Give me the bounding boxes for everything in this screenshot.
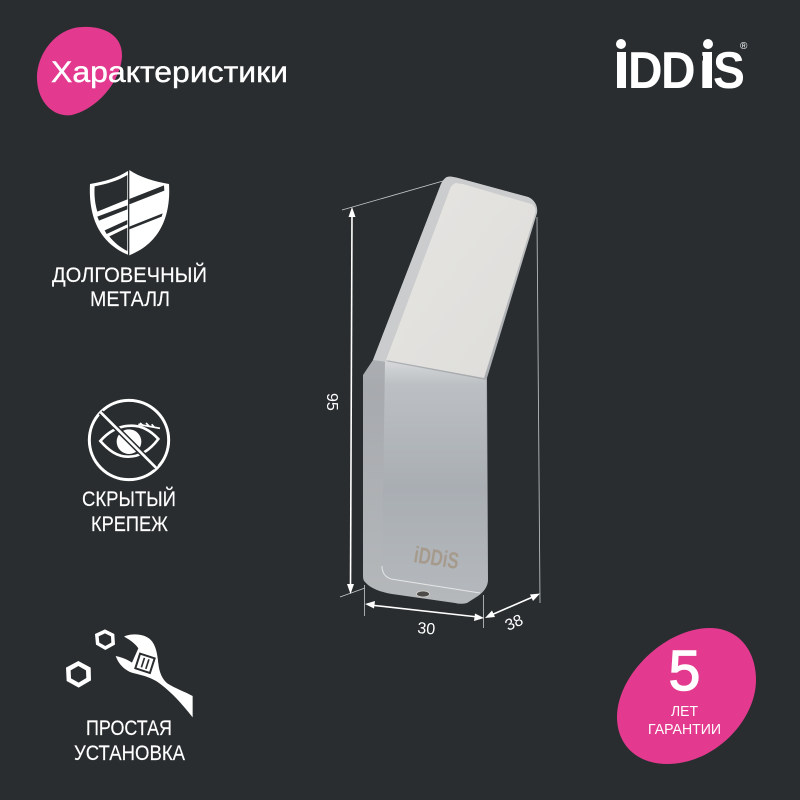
upper slanted edge <box>373 177 535 362</box>
years label: ЛЕТ <box>671 703 698 720</box>
screw hole <box>416 591 430 597</box>
feature: hidden fastening <box>82 400 176 536</box>
feature: durable metal <box>52 170 207 311</box>
product: towel hook <box>363 177 537 604</box>
registered mark: ® <box>740 41 748 52</box>
icon: shield <box>90 170 169 255</box>
label: СКРЫТЫЙ <box>82 487 176 511</box>
badge blob <box>617 628 756 764</box>
feature: easy installation <box>66 629 193 765</box>
extension line <box>537 217 540 603</box>
warranty label: ГАРАНТИИ <box>648 721 721 738</box>
warranty badge <box>617 628 756 764</box>
label: ПРОСТАЯ <box>86 717 172 740</box>
logo i stems and dots <box>617 52 712 88</box>
arrow line <box>489 596 535 616</box>
value: 30 <box>417 620 436 639</box>
feature: durable metal: МЕТАЛЛ <box>90 288 170 311</box>
arrow line <box>370 605 478 617</box>
value: 38 <box>503 612 526 635</box>
hook body silhouette <box>363 177 537 604</box>
heading text: Характеристики <box>51 56 288 89</box>
arrow line <box>350 212 352 588</box>
extension lines <box>340 181 443 597</box>
logo wordmark: iDDiS <box>615 41 745 99</box>
feature: hidden fastening: КРЕПЕЖ <box>91 513 169 536</box>
value: 95 <box>323 393 340 411</box>
dimension: height 95 <box>323 181 443 597</box>
heading: Характеристики <box>37 27 288 115</box>
lower front panel <box>382 361 487 592</box>
label: ДОЛГОВЕЧНЫЙ <box>52 263 207 287</box>
logo: IDDIS <box>614 39 748 99</box>
dimension: depth 38 <box>485 217 540 635</box>
panel highlight <box>382 566 480 593</box>
dimension: width 30 <box>364 585 484 639</box>
product logo: iDDiS <box>412 541 461 574</box>
heading blob <box>37 27 122 115</box>
icon: crossed-out eye <box>89 400 169 480</box>
extension lines <box>364 585 484 628</box>
icon: wrench and nuts <box>66 629 193 717</box>
number 5: 5 <box>669 639 700 703</box>
feature: easy installation: УСТАНОВКА <box>74 742 185 765</box>
upper white face <box>386 183 536 378</box>
